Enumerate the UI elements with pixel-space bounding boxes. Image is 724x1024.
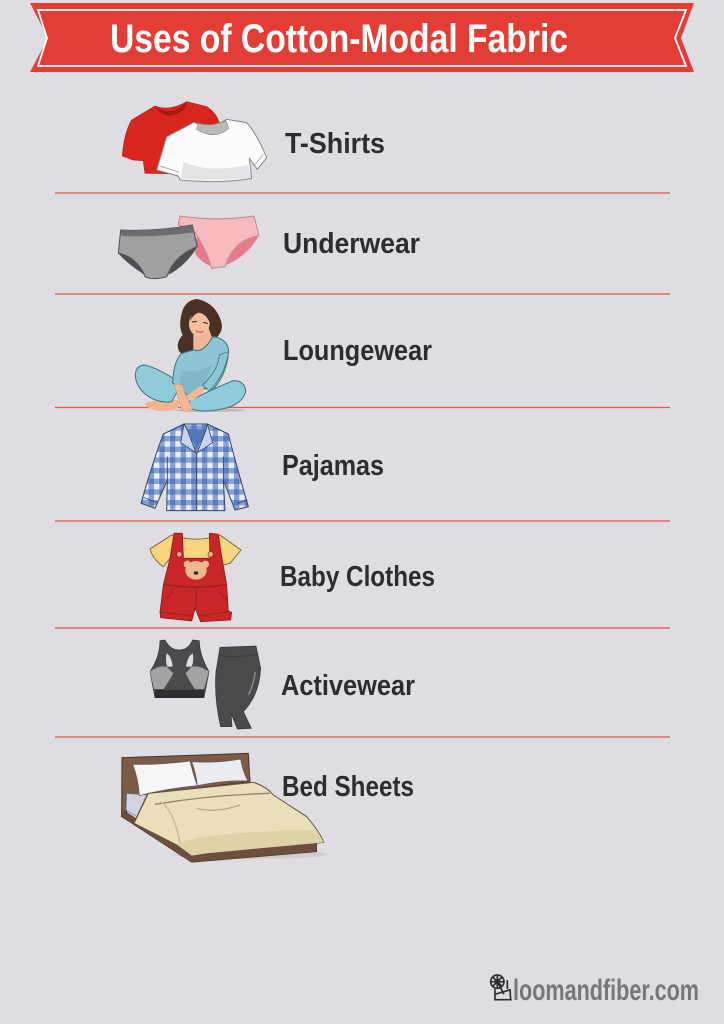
label: T-Shirts bbox=[285, 128, 385, 160]
icon: sports bra and leggings bbox=[150, 640, 261, 729]
icon: bed bbox=[122, 753, 327, 862]
row: activewear bbox=[150, 640, 415, 729]
row: loungewear bbox=[135, 299, 432, 412]
icon: t-shirts bbox=[122, 102, 267, 182]
row: underwear bbox=[118, 216, 420, 279]
row: bed sheets bbox=[122, 753, 414, 862]
label: Loungewear bbox=[283, 335, 432, 367]
row: pajamas bbox=[141, 424, 384, 511]
row: baby clothes bbox=[150, 533, 435, 622]
icon: baby overalls bbox=[150, 533, 241, 622]
row: t-shirts bbox=[122, 102, 385, 182]
icon: woman in loungewear bbox=[135, 299, 246, 412]
label: Pajamas bbox=[282, 450, 384, 482]
label: Baby Clothes bbox=[280, 561, 435, 593]
label: Activewear bbox=[281, 670, 415, 702]
title banner bbox=[30, 3, 694, 72]
label: Underwear bbox=[283, 228, 420, 260]
title: Uses of Cotton-Modal Fabric bbox=[110, 17, 568, 61]
icon: underwear bbox=[118, 216, 259, 279]
icon: plaid pajama shirt bbox=[141, 424, 248, 511]
footer logo bbox=[491, 974, 699, 1007]
icon: spinning wheel bbox=[491, 975, 512, 1000]
label: Bed Sheets bbox=[282, 771, 414, 803]
